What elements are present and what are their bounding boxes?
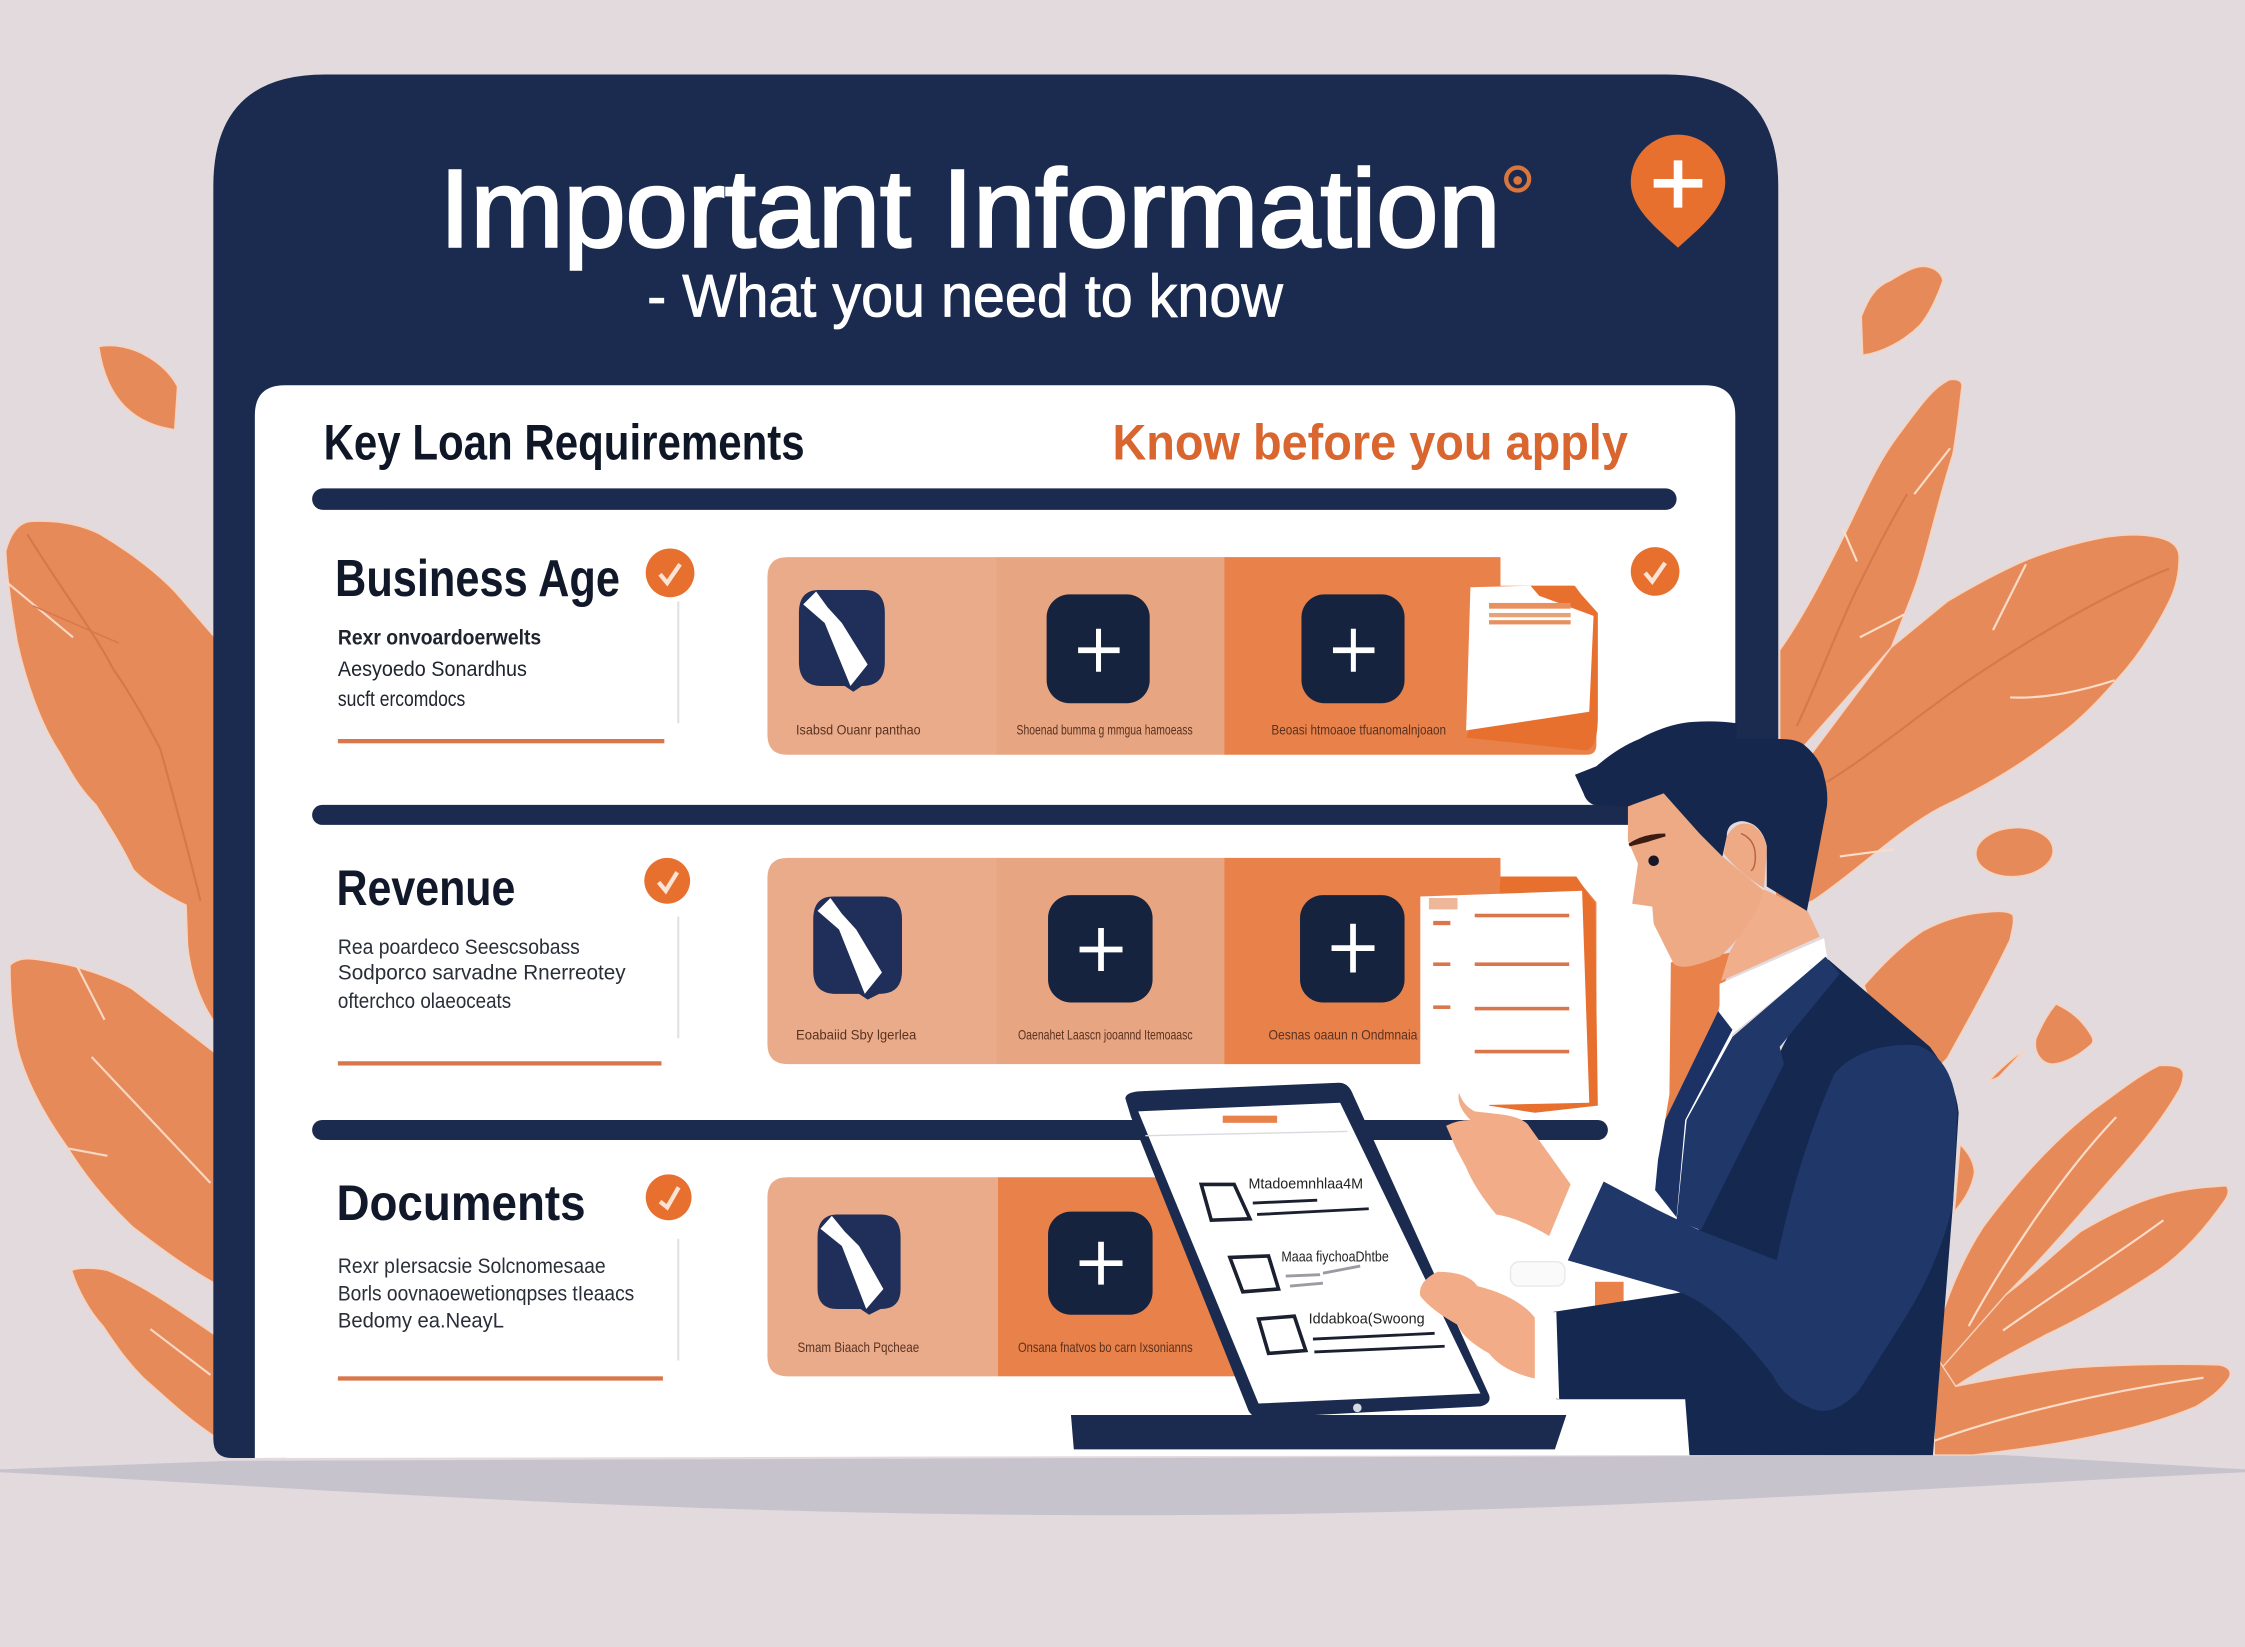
- plus icon: [1048, 1212, 1153, 1315]
- faint cuff outline: [1511, 1262, 1565, 1286]
- row check badge: [1631, 547, 1679, 596]
- business age description: Rexr onvoardoerwelts: [338, 625, 541, 649]
- business age check badge: [646, 549, 694, 597]
- heading: know before you apply: Know before you apply: [1112, 415, 1628, 471]
- subtitle: - What you need to know: [647, 263, 1283, 330]
- icon: orange plus pin: [1631, 135, 1725, 248]
- captions: [796, 723, 1446, 738]
- documents description: [338, 1254, 634, 1333]
- tie icon: [813, 897, 902, 1000]
- tablet row three: Iddabkoa(Swoong: [1309, 1310, 1425, 1327]
- orange backdrop behind neck: [1665, 952, 1732, 1120]
- tie icon: [818, 1214, 901, 1315]
- tie icon: [799, 590, 885, 692]
- revenue description: ofterchco olaeoceats: [338, 989, 511, 1013]
- right leaves: [1775, 266, 2230, 1455]
- row: documents: [336, 1174, 1624, 1381]
- tablet home button: [1353, 1404, 1362, 1412]
- documents heading: Documents: [336, 1175, 586, 1231]
- business age description: sucft ercomdocs: [338, 687, 465, 711]
- business age card: [767, 557, 1598, 755]
- registered mark: [1506, 168, 1529, 190]
- captions: Beoasi htmoaoe tfuanomalnjoaon: [1271, 723, 1446, 738]
- hand holding paper: [1446, 1093, 1571, 1236]
- business age description: Aesyoedo Sonardhus: [338, 657, 527, 681]
- tablet header bar: [1223, 1116, 1277, 1123]
- tablet: [1125, 1083, 1490, 1418]
- jacket lapel: [1677, 957, 1840, 1230]
- row: revenue: [336, 858, 1598, 1113]
- white shirt cuff: [1549, 1182, 1604, 1259]
- documents description: Rexr pIersacsie Solcnomesaae: [338, 1254, 606, 1278]
- plus icon: [1048, 895, 1153, 1003]
- documents check badge: [646, 1174, 692, 1220]
- row: business age: [335, 547, 1679, 755]
- captions: Shoenad bumma g mmgua hamoeass: [1017, 723, 1193, 738]
- tablet row one: Mtadoemnhlaa4M: [1248, 1176, 1363, 1193]
- captions: Oesnas oaaun n Ondmnaia: [1269, 1028, 1418, 1043]
- tablet row three: [1259, 1310, 1445, 1353]
- panel: white requirements sheet: [255, 385, 1735, 1458]
- business age heading: Business Age: [335, 549, 620, 607]
- plus icon: [1047, 594, 1150, 703]
- jacket sleeve: [1568, 1045, 1957, 1411]
- jacket body: [1553, 960, 1959, 1455]
- revenue description: [338, 935, 626, 1013]
- documents card: [767, 1177, 1624, 1376]
- captions: [797, 1340, 1193, 1355]
- heading: key loan requirements: Key Loan Requirements: [324, 415, 805, 471]
- person: [1446, 721, 1959, 1455]
- plus icon: [1300, 895, 1405, 1003]
- eyebrow: [1629, 835, 1665, 845]
- collar and shirt: [1677, 938, 1827, 1232]
- tie and inner jacket: [1655, 1011, 1732, 1217]
- title: Important Information: [440, 147, 1500, 270]
- revenue check badge: [644, 858, 690, 904]
- eye: [1648, 855, 1659, 866]
- revenue card: [767, 858, 1596, 1064]
- hair: [1575, 721, 1827, 911]
- folder with paper list: [1420, 876, 1598, 1113]
- face: [1628, 793, 1764, 967]
- tablet row one: [1201, 1176, 1369, 1220]
- revenue heading: Revenue: [336, 860, 515, 916]
- hand holding tablet: [1420, 1272, 1559, 1399]
- left leaves: [6, 346, 215, 1436]
- desk: [1071, 1415, 1566, 1449]
- ground shadow: [0, 1455, 2245, 1515]
- neck: [1721, 889, 1820, 981]
- tablet row two: [1230, 1249, 1389, 1292]
- revenue description: Sodporco sarvadne Rnerreotey: [338, 961, 626, 985]
- documents description: Bedomy ea.NeayL: [338, 1309, 504, 1333]
- tablet row two: Maaa fiychoaDhtbe: [1281, 1249, 1389, 1266]
- captions: [796, 1028, 1418, 1043]
- captions: Eoabaiid Sby lgerlea: [796, 1028, 917, 1043]
- tablet screen: [1138, 1103, 1480, 1404]
- folder document: [1466, 586, 1598, 750]
- business age description: [338, 625, 541, 711]
- captions: Onsana fnatvos bo carn Ixsonianns: [1018, 1340, 1193, 1355]
- revenue description: Rea poardeco Seescsobass: [338, 935, 580, 959]
- documents description: Borls oovnaoewetionqpses tIeaacs: [338, 1281, 634, 1305]
- captions: Isabsd Ouanr panthao: [796, 723, 921, 738]
- ear: [1724, 824, 1767, 888]
- panel: navy header card: [213, 74, 1778, 1458]
- captions: Smam Biaach Pqcheae: [797, 1340, 919, 1355]
- captions: Oaenahet Laascn jooannd Itemoaasc: [1018, 1028, 1193, 1043]
- plus icon: [1301, 594, 1405, 703]
